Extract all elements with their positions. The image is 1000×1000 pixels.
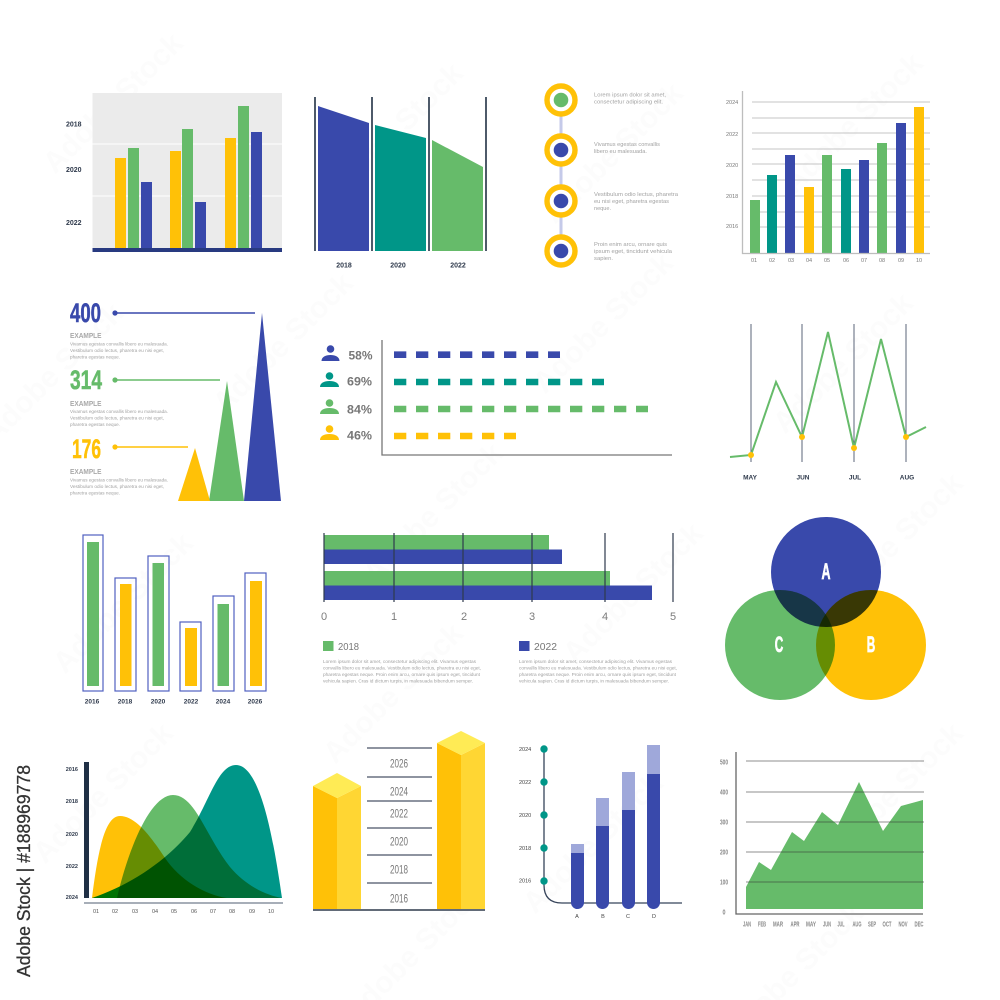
- panel: overlapping area curves: 2018: [66, 799, 78, 805]
- panel: isometric columns with year scale: 2022: [390, 806, 408, 820]
- panel: vertical timeline with text: libero eu malesuada.: [594, 149, 647, 155]
- panel: isometric columns with year scale: 2020: [390, 834, 408, 848]
- panel: horizontal bar chart with legend: convallis libero eu malesuada. Vestibulum odio lectus, pharetra eu nisi eget,: [519, 666, 677, 672]
- panel: boxed column chart: [83, 535, 266, 706]
- panel: green area chart: SEP: [868, 922, 876, 928]
- panel: green area chart: DEC: [914, 922, 924, 928]
- panel: vertical timeline with text: Lorem ipsum dolor sit amet,: [594, 92, 666, 98]
- panel: vertical timeline with text: Vestibulum odio lectus, pharetra: [594, 192, 679, 198]
- panel: green area chart: 500: [720, 758, 728, 766]
- panel: boxed column chart: 2024: [216, 698, 231, 706]
- icon: blue person: [322, 345, 340, 361]
- panel: percentage dashed bars with person icons: 69%: [347, 374, 372, 388]
- panel: rounded column chart with timeline axis: 2018: [519, 846, 531, 852]
- panel: isometric columns with year scale: 2024: [390, 784, 408, 798]
- icon: green person: [320, 399, 339, 414]
- panel: triangle chart with values: Vestibulum odio lectus, pharetra eu nisi eget,: [70, 348, 164, 354]
- panel: horizontal bar chart with legend: Lorem ipsum dolor sit amet, consectetur adipiscing elit. Vivamus egestas: [323, 659, 477, 665]
- panel: Venn diagram: [725, 517, 926, 700]
- panel: vertical timeline with text: Proin enim arcu, ornare quis: [594, 242, 667, 248]
- panel: descending area segments: 2018: [336, 262, 352, 270]
- panel: overlapping area curves: 08: [229, 909, 235, 915]
- panel: green area chart: APR: [790, 922, 800, 928]
- panel: descending area segments: 2020: [390, 262, 406, 270]
- panel: Venn diagram: A: [822, 559, 831, 584]
- panel: horizontal bar chart with legend: 2: [461, 611, 467, 623]
- panel: green area chart: 300: [720, 818, 728, 826]
- panel: green area chart: 0: [722, 908, 726, 916]
- panel: ten-bar column chart: 08: [879, 258, 885, 264]
- panel: triangle chart with values: Vivamus egestas convallis libero eu malesuada.: [70, 409, 168, 415]
- panel: ten-bar column chart: 05: [824, 258, 830, 264]
- panel: boxed column chart: 2026: [248, 698, 263, 706]
- panel: triangle chart with values: pharetra egestas neque.: [70, 422, 120, 428]
- panel: isometric columns with year scale: 2018: [390, 862, 408, 876]
- panel: ten-bar column chart: 06: [843, 258, 849, 264]
- panel: horizontal bar chart with legend: 0: [321, 611, 327, 623]
- panel: triangle chart with values: EXAMPLE: [70, 469, 102, 476]
- panel: green area chart: OCT: [882, 922, 892, 928]
- panel: zigzag line chart: MAY: [743, 474, 758, 482]
- panel: green area chart: NOV: [898, 922, 908, 928]
- panel: overlapping area curves: 01: [93, 909, 99, 915]
- panel: horizontal bar chart with legend: 1: [391, 611, 397, 623]
- panel: green area chart: MAR: [773, 922, 783, 928]
- panel: ten-bar column chart: 03: [788, 258, 794, 264]
- panel: green area chart: 100: [720, 878, 728, 886]
- panel: rounded column chart with timeline axis: [519, 745, 682, 920]
- panel: overlapping area curves: 2016: [66, 767, 78, 773]
- panel: horizontal bar chart with legend: [321, 533, 677, 684]
- panel: overlapping area curves: 2020: [66, 832, 78, 838]
- panel: isometric columns with year scale: [313, 731, 485, 910]
- stock credit label: Adobe Stock | #188969778: [14, 765, 34, 977]
- panel: triangle chart with values: EXAMPLE: [70, 401, 102, 408]
- panel: zigzag line chart: [730, 324, 926, 482]
- panel: ten-bar column chart: 04: [806, 258, 812, 264]
- panel: triangle chart with values: EXAMPLE: [70, 333, 102, 340]
- panel: vertical timeline with text: sapien.: [594, 256, 613, 262]
- panel: rounded column chart with timeline axis: 2024: [519, 747, 531, 753]
- panel: percentage dashed bars with person icons: 58%: [348, 348, 373, 362]
- panel: ten-bar column chart: 02: [769, 258, 775, 264]
- panel: vertical timeline with text: Vivamus egestas convallis: [594, 142, 660, 148]
- panel: horizontal bar chart with legend: 2018: [338, 642, 359, 653]
- panel: vertical timeline with text: neque.: [594, 206, 611, 212]
- panel: vertical timeline with text: eu nisi eget, pharetra egestas: [594, 199, 669, 205]
- panel: green area chart: JUL: [838, 922, 845, 928]
- panel: triangle chart with values: Vivamus egestas convallis libero eu malesuada.: [70, 342, 168, 348]
- panel: boxed column chart: 2022: [184, 698, 199, 706]
- panel: horizontal bar chart with legend: 4: [602, 611, 608, 623]
- panel: horizontal bar chart with legend: vehicula sapien. Cras id dictum turpis, in malesuada bibendum semper.: [519, 678, 669, 684]
- panel: horizontal bar chart with legend: 2022: [534, 642, 557, 653]
- panel: ten-bar column chart: 09: [898, 258, 904, 264]
- panel: green area chart: 400: [720, 788, 728, 796]
- panel: rounded column chart with timeline axis: 2022: [519, 780, 531, 786]
- panel: descending area segments: [315, 97, 486, 270]
- panel: overlapping area curves: 10: [268, 909, 274, 915]
- panel: boxed column chart: 2020: [151, 698, 166, 706]
- panel: green area chart: AUG: [852, 922, 862, 928]
- panel: overlapping area curves: 03: [132, 909, 138, 915]
- panel: percentage dashed bars with person icons: [320, 340, 672, 455]
- panel: Venn diagram: B: [867, 632, 875, 657]
- panel: descending area segments: 2022: [450, 262, 466, 270]
- panel: boxed column chart: 2016: [85, 698, 100, 706]
- panel: horizontal bar chart with legend: 3: [529, 611, 535, 623]
- panel: green area chart: FEB: [758, 922, 766, 928]
- panel: Venn diagram: C: [775, 632, 783, 657]
- panel: green area chart: [720, 752, 924, 928]
- panel: boxed column chart: 2018: [118, 698, 133, 706]
- panel: triangle chart with values: pharetra egestas neque.: [70, 354, 120, 360]
- panel: percentage dashed bars with person icons: 46%: [347, 428, 372, 442]
- panel: horizontal bar chart with legend: vehicula sapien. Cras id dictum turpis, in malesuada bibendum semper.: [323, 678, 473, 684]
- panel: ten-bar column chart: [726, 91, 930, 264]
- panel: isometric columns with year scale: 2026: [390, 756, 408, 770]
- panel: ten-bar column chart: 2022: [726, 132, 738, 138]
- panel: triangle chart with values: 400: [70, 298, 101, 328]
- panel: overlapping area curves: 02: [112, 909, 118, 915]
- panel: isometric columns with year scale: 2016: [390, 892, 408, 906]
- panel: overlapping area curves: 04: [152, 909, 158, 915]
- panel: overlapping area curves: 07: [210, 909, 216, 915]
- panel: horizontal bar chart with legend: pharetra egestas neque. Proin enim arcu, ornare quis ipsum eget, tincidunt: [323, 672, 481, 678]
- panel: ten-bar column chart: 2016: [726, 224, 738, 230]
- panel: green area chart: MAY: [806, 922, 816, 928]
- panel: rounded column chart with timeline axis: C: [626, 914, 630, 920]
- panel: ten-bar column chart: 2020: [726, 163, 738, 169]
- panel: rounded column chart with timeline axis: A: [575, 914, 579, 920]
- panel: zigzag line chart: AUG: [900, 474, 914, 482]
- panel: rounded column chart with timeline axis: 2016: [519, 878, 531, 884]
- panel: grouped bar chart on grey background: 2020: [66, 167, 82, 174]
- panel: ten-bar column chart: 10: [916, 258, 922, 264]
- panel: vertical timeline with text: consectetur adipiscing elit.: [594, 100, 663, 106]
- panel: overlapping area curves: 06: [191, 909, 197, 915]
- panel: triangle chart with values: Vivamus egestas convallis libero eu malesuada.: [70, 478, 168, 484]
- panel: triangle chart with values: [70, 298, 281, 501]
- panel: triangle chart with values: pharetra egestas neque.: [70, 490, 120, 496]
- panel: zigzag line chart: JUN: [796, 474, 810, 482]
- panel: ten-bar column chart: 07: [861, 258, 867, 264]
- panel: overlapping area curves: 09: [249, 909, 255, 915]
- panel: ten-bar column chart: 01: [751, 258, 757, 264]
- panel: triangle chart with values: Vestibulum odio lectus, pharetra eu nisi eget,: [70, 484, 164, 490]
- panel: grouped bar chart on grey background: [66, 93, 282, 252]
- panel: green area chart: JAN: [743, 922, 751, 928]
- panel: percentage dashed bars with person icons: 84%: [347, 402, 372, 416]
- panel: triangle chart with values: 176: [72, 434, 101, 464]
- panel: triangle chart with values: Vestibulum odio lectus, pharetra eu nisi eget,: [70, 416, 164, 422]
- panel: horizontal bar chart with legend: 5: [670, 611, 676, 623]
- panel: overlapping area curves: 2022: [66, 864, 78, 870]
- panel: vertical timeline with text: ipsum eget, tincidunt vehicula: [594, 249, 673, 255]
- panel: horizontal bar chart with legend: pharetra egestas neque. Proin enim arcu, ornare quis ipsum eget, tincidunt: [519, 672, 677, 678]
- panel: overlapping area curves: 05: [171, 909, 177, 915]
- panel: grouped bar chart on grey background: 2022: [66, 220, 82, 227]
- panel: overlapping area curves: 2024: [66, 895, 79, 901]
- panel: ten-bar column chart: 2024: [726, 100, 738, 106]
- panel: rounded column chart with timeline axis: D: [652, 914, 656, 920]
- panel: overlapping area curves: [66, 762, 283, 915]
- panel: green area chart: 200: [720, 848, 728, 856]
- panel: vertical timeline with text: [547, 86, 679, 265]
- panel: horizontal bar chart with legend: convallis libero eu malesuada. Vestibulum odio lectus, pharetra eu nisi eget,: [323, 666, 481, 672]
- panel: rounded column chart with timeline axis: 2020: [519, 813, 531, 819]
- panel: triangle chart with values: 314: [70, 365, 102, 395]
- panel: grouped bar chart on grey background: 2018: [66, 122, 82, 128]
- icon: teal person: [320, 372, 339, 387]
- panel: rounded column chart with timeline axis: B: [601, 914, 605, 920]
- panel: horizontal bar chart with legend: Lorem ipsum dolor sit amet, consectetur adipiscing elit. Vivamus egestas: [519, 659, 673, 665]
- panel: ten-bar column chart: 2018: [726, 194, 738, 200]
- icon: yellow person: [320, 425, 339, 440]
- panel: green area chart: JUN: [823, 922, 831, 928]
- panel: zigzag line chart: JUL: [849, 474, 861, 482]
